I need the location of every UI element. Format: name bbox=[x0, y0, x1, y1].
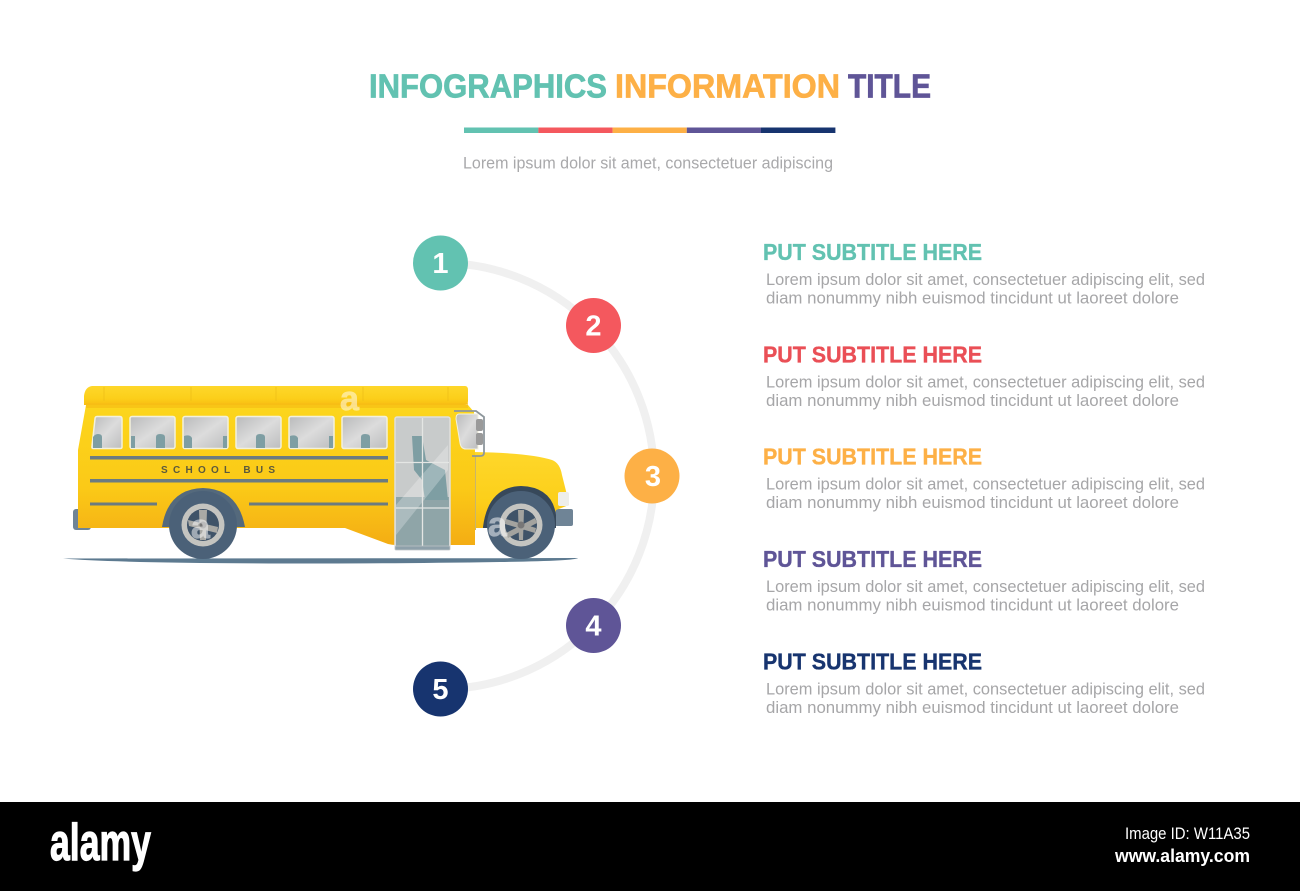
step marker 1 bbox=[413, 236, 468, 290]
headlight bbox=[558, 492, 569, 506]
door bbox=[395, 417, 450, 550]
title tagline: Lorem ipsum dolor sit amet, consectetuer adipiscing bbox=[463, 154, 833, 172]
text block 3: PUT SUBTITLE HERE bbox=[763, 444, 982, 470]
step marker 5: 5 bbox=[432, 674, 449, 706]
rear bumper bbox=[73, 509, 91, 530]
text block 1: Lorem ipsum dolor sit amet, consectetuer adipiscing elit, sed bbox=[766, 271, 1205, 289]
title bbox=[369, 68, 931, 104]
text block 5: diam nonummy nibh euismod tincidunt ut laoreet dolore bbox=[766, 699, 1179, 717]
hood bbox=[474, 452, 569, 528]
watermark marks: a bbox=[340, 380, 360, 418]
text block 3: diam nonummy nibh euismod tincidunt ut laoreet dolore bbox=[766, 494, 1179, 512]
title: TITLE bbox=[848, 68, 931, 104]
roof seams bbox=[104, 387, 448, 401]
text block 4 bbox=[763, 546, 1205, 614]
text block 3: Lorem ipsum dolor sit amet, consectetuer adipiscing elit, sed bbox=[766, 476, 1205, 494]
rear wheel bbox=[162, 488, 245, 559]
text block 2: diam nonummy nibh euismod tincidunt ut laoreet dolore bbox=[766, 392, 1179, 410]
title: INFOGRAPHICS bbox=[369, 68, 607, 104]
cab window bbox=[456, 414, 478, 449]
text block 5 bbox=[763, 648, 1205, 717]
text block 5: Lorem ipsum dolor sit amet, consectetuer adipiscing elit, sed bbox=[766, 680, 1205, 698]
title: INFORMATION bbox=[615, 68, 840, 104]
text block 3 bbox=[763, 444, 1205, 512]
step marker 5 bbox=[413, 662, 468, 716]
front bumper bbox=[555, 509, 573, 526]
text block 4: Lorem ipsum dolor sit amet, consectetuer adipiscing elit, sed bbox=[766, 578, 1205, 596]
footer band bbox=[0, 802, 1300, 891]
step marker 2: 2 bbox=[585, 310, 602, 342]
watermark marks: a bbox=[488, 506, 508, 544]
side stripes bbox=[90, 456, 388, 506]
step marker 4: 4 bbox=[585, 610, 602, 642]
text block 2: Lorem ipsum dolor sit amet, consectetuer adipiscing elit, sed bbox=[766, 374, 1205, 392]
text block 4: PUT SUBTITLE HERE bbox=[763, 546, 982, 572]
watermark marks: a bbox=[191, 508, 211, 546]
website: www.alamy.com bbox=[1114, 846, 1250, 866]
cab seam bbox=[474, 456, 476, 530]
step marker 2 bbox=[566, 298, 621, 353]
front wheel bbox=[483, 486, 556, 559]
bus lettering: SCHOOL BUS bbox=[161, 465, 275, 476]
roof bbox=[84, 386, 468, 405]
side windows bbox=[92, 416, 387, 448]
roof shade bbox=[86, 403, 468, 408]
connecting arc bbox=[441, 263, 654, 689]
text block 2: PUT SUBTITLE HERE bbox=[763, 342, 982, 368]
step marker 3: 3 bbox=[645, 461, 661, 493]
side mirror bbox=[454, 411, 484, 456]
step marker 3 bbox=[624, 448, 680, 504]
text block 1: diam nonummy nibh euismod tincidunt ut laoreet dolore bbox=[766, 290, 1179, 308]
footer logo: alamy bbox=[50, 814, 151, 872]
bus body bbox=[78, 405, 475, 545]
school bus illustration bbox=[63, 380, 578, 564]
ground shadow bbox=[63, 558, 578, 564]
step marker 4 bbox=[566, 598, 621, 653]
text block 2 bbox=[763, 342, 1205, 410]
text block 1 bbox=[763, 239, 1205, 308]
text block 1: PUT SUBTITLE HERE bbox=[763, 239, 982, 265]
text block 4: diam nonummy nibh euismod tincidunt ut laoreet dolore bbox=[766, 596, 1179, 614]
title colour bar bbox=[464, 128, 835, 133]
step marker 1: 1 bbox=[432, 248, 449, 280]
seats in windows bbox=[93, 434, 370, 448]
image id: Image ID: W11A35 bbox=[1125, 824, 1250, 843]
text block 5: PUT SUBTITLE HERE bbox=[763, 648, 982, 674]
watermark marks bbox=[191, 380, 508, 546]
